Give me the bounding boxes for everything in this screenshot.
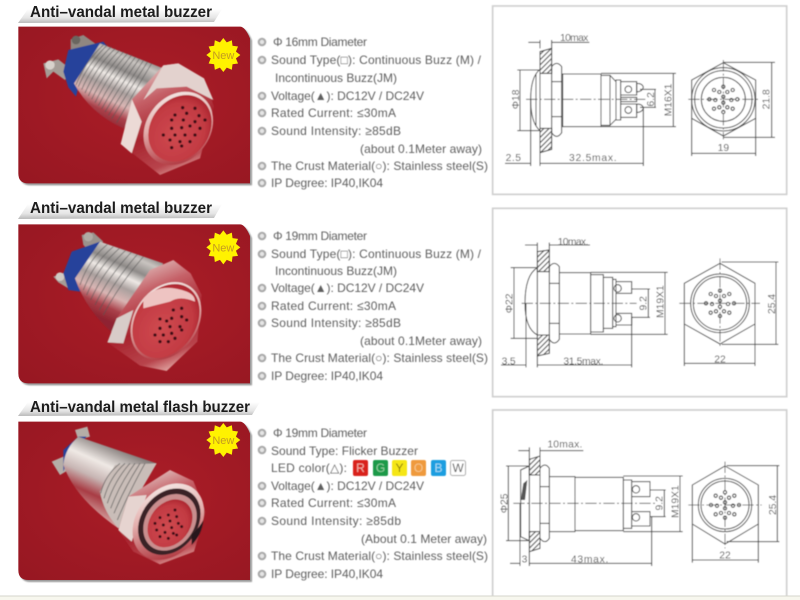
specification list (flash) xyxy=(258,426,488,581)
specification list (flash): LED color(△): xyxy=(271,461,347,475)
specification list (flash): Φ 19mm Diameter xyxy=(273,426,367,440)
title: Anti-vandal metal buzzer: Anti–vandal metal buzzer xyxy=(30,4,212,21)
product photo: flash buzzer xyxy=(18,422,252,582)
specification list (flash): Sound Intensity: ≥85db xyxy=(271,514,401,528)
LED colour swatches: B xyxy=(434,461,443,475)
technical drawing: 19mm buzzer: Φ22 xyxy=(504,293,515,313)
technical drawing: 16mm buzzer xyxy=(493,6,787,194)
technical drawing: 19mm buzzer: 10max. xyxy=(558,237,588,248)
specification list (19mm) xyxy=(258,229,488,383)
specification list (19mm): Φ 19mm Diameter xyxy=(273,229,367,243)
specification list (flash): The Crust Material(○): Stainless steel(S) xyxy=(271,549,488,563)
technical drawing: flash buzzer xyxy=(493,410,787,597)
specification list (19mm): Incontinuous Buzz(JM) xyxy=(275,264,397,278)
specification list xyxy=(258,35,488,190)
specification list: The Crust Material(○): Stainless steel(S) xyxy=(271,159,488,173)
panel: 16mm buzzer xyxy=(18,4,787,194)
specification list: Incontinuous Buzz(JM) xyxy=(275,71,397,85)
specification list (19mm): Voltage(▲): DC12V / DC24V xyxy=(271,281,424,295)
technical drawing: 16mm buzzer: 32.5max. xyxy=(569,153,617,164)
specification list (19mm): (about 0.1Meter away) xyxy=(360,334,482,348)
LED colour swatches: O xyxy=(414,461,423,475)
specification list: Φ 16mm Diameter xyxy=(273,35,367,49)
product photo: 19mm buzzer: New xyxy=(212,242,234,254)
specification list (19mm): Sound Type(□): Continuous Buzz (M) / xyxy=(271,247,482,261)
LED colour swatches: Y xyxy=(395,461,404,475)
title: Anti-vandal metal flash buzzer: Anti–vandal metal flash buzzer xyxy=(30,399,250,416)
specification list: Rated Current: ≤30mA xyxy=(271,106,396,120)
technical drawing: 19mm buzzer: 3.5 xyxy=(502,356,516,367)
specification list: Sound Type(□): Continuous Buzz (M) / xyxy=(271,53,482,67)
technical drawing: 16mm buzzer: 6.2 xyxy=(646,92,657,107)
specification list: (about 0.1Meter away) xyxy=(360,142,482,156)
technical drawing: 16mm buzzer: 10max xyxy=(560,33,589,44)
technical drawing: 16mm buzzer: 19 xyxy=(718,143,729,154)
technical drawing: flash buzzer: 3 xyxy=(522,554,528,565)
title: Anti-vandal metal buzzer (19mm): Anti–vandal metal buzzer xyxy=(30,200,212,217)
specification list: Voltage(▲): DC12V / DC24V xyxy=(271,89,424,103)
technical drawing: flash buzzer: 43max. xyxy=(571,554,608,565)
specification list (19mm): IP Degree: IP40,IK04 xyxy=(271,369,383,383)
technical drawing: flash buzzer: 25.4 xyxy=(768,495,779,515)
technical drawing: 16mm buzzer: 21.8 xyxy=(761,89,772,109)
technical drawing: 16mm buzzer: M16X1 xyxy=(664,83,675,116)
technical drawing: 19mm buzzer: 31.5max. xyxy=(563,356,603,367)
technical drawing: 16mm buzzer: 2.5 xyxy=(506,153,521,164)
specification list (flash): (About 0.1 Meter away) xyxy=(361,532,487,546)
technical drawing: flash buzzer: 10max. xyxy=(547,440,582,451)
technical drawing: flash buzzer: 9.2 xyxy=(655,496,666,511)
product photo: 19mm buzzer xyxy=(18,224,252,385)
technical drawing: flash buzzer: M19X1 xyxy=(670,485,681,518)
panel: 19mm buzzer xyxy=(18,200,787,397)
specification list (19mm): Rated Current: ≤30mA xyxy=(271,299,396,313)
technical drawing: 19mm buzzer: M19X1 xyxy=(655,285,666,318)
specification list (flash): IP Degree: IP40,IK04 xyxy=(271,567,383,581)
specification list: Sound Intensity: ≥85dB xyxy=(271,124,401,138)
specification list (flash): Rated Current: ≤30mA xyxy=(271,496,396,510)
technical drawing: 19mm buzzer: 25.4 xyxy=(767,294,778,314)
technical drawing: 19mm buzzer xyxy=(493,208,787,397)
LED colour swatches: R xyxy=(356,461,365,475)
LED colour swatches: W xyxy=(452,461,464,475)
LED colour swatches: G xyxy=(376,461,385,475)
product photo: flash buzzer: New xyxy=(212,435,234,447)
specification list (flash): Sound Type: Flicker Buzzer xyxy=(271,444,418,458)
technical drawing: flash buzzer: Φ25 xyxy=(499,493,510,513)
specification list: IP Degree: IP40,IK04 xyxy=(271,176,383,190)
product photo: 16mm buzzer xyxy=(18,27,252,185)
technical drawing: 16mm buzzer: Φ18 xyxy=(511,89,522,109)
specification list (flash): Voltage(▲): DC12V / DC24V xyxy=(271,479,424,493)
specification list (19mm): Sound Intensity: ≥85dB xyxy=(271,316,401,330)
panel: flash buzzer xyxy=(18,399,787,597)
technical drawing: 19mm buzzer: 22 xyxy=(714,355,726,366)
technical drawing: 19mm buzzer: 9.2 xyxy=(639,296,650,311)
LED colour swatches xyxy=(353,460,466,476)
technical drawing: flash buzzer: 22 xyxy=(719,550,731,561)
specification list (19mm): The Crust Material(○): Stainless steel(S) xyxy=(271,351,488,365)
product photo: 16mm buzzer: New xyxy=(212,50,234,62)
